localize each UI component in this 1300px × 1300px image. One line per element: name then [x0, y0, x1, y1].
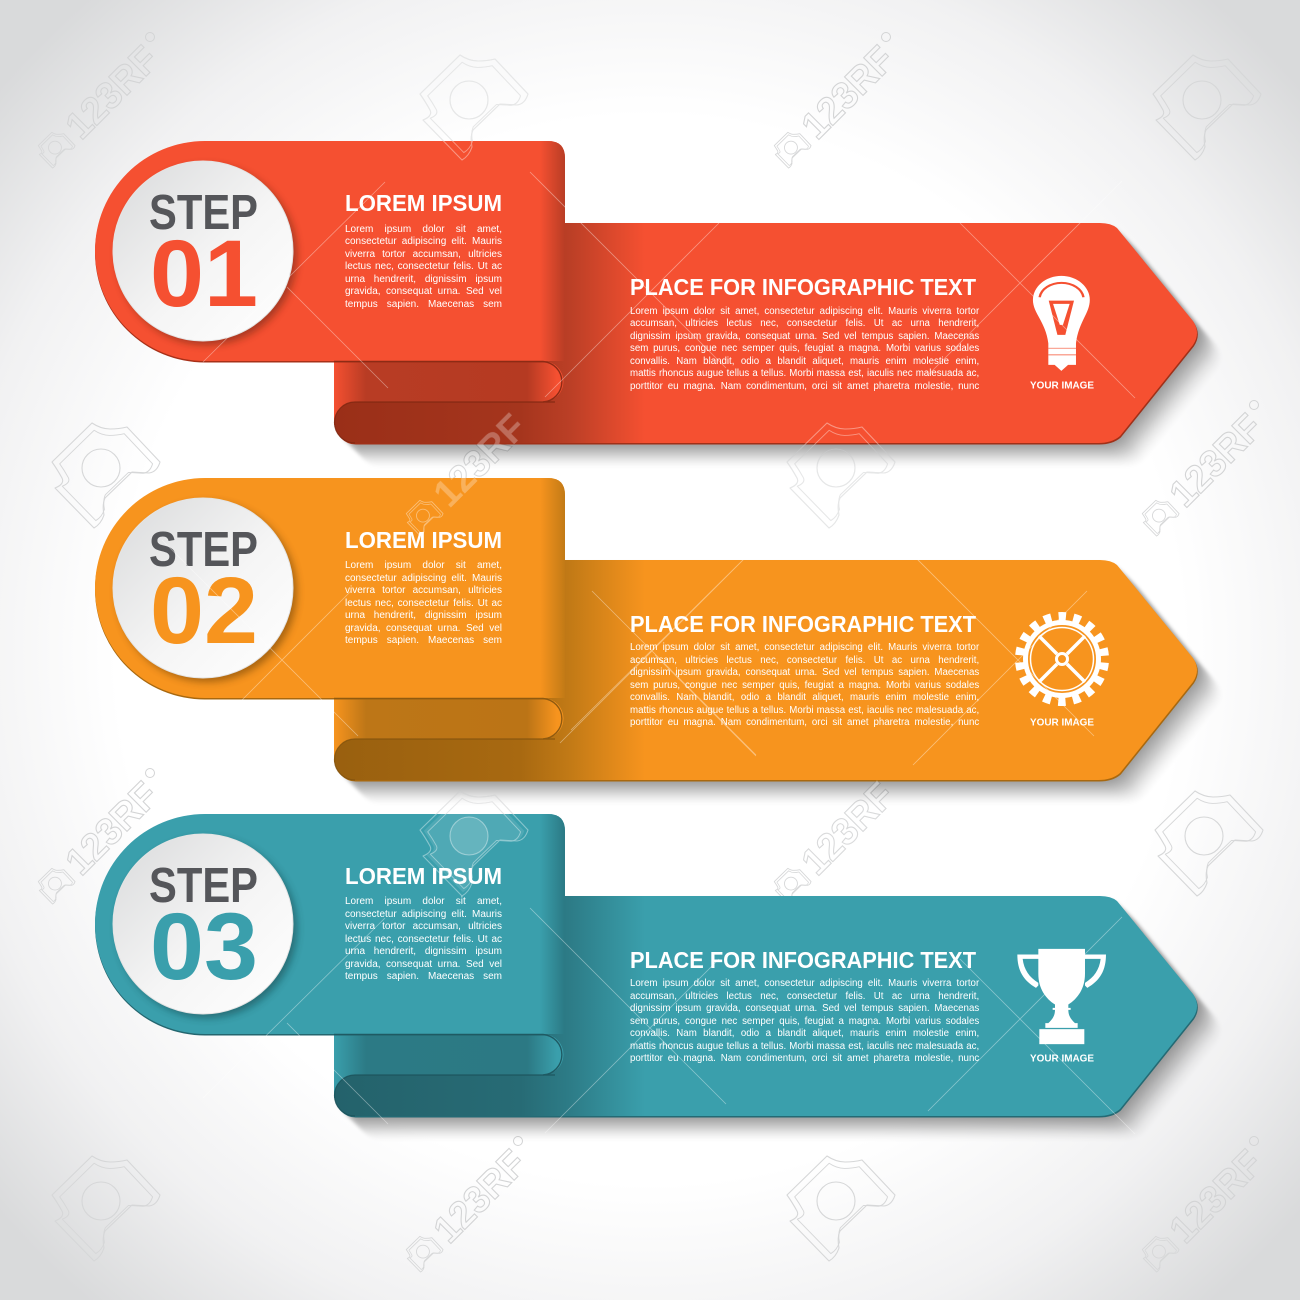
band body text: convallis. Nam blandit, odio a blandit aliquet, mauris enim molestie enim, [630, 1028, 979, 1039]
tab body text: urna hendrerit, dignissim ipsum [345, 274, 502, 284]
step badge [113, 834, 297, 1018]
band body text: mattis rhoncus augue tellus a tellus. Morbi massa est, iaculis nec malesuada ac, [630, 368, 979, 379]
icon: trophy [1017, 948, 1106, 1044]
band body text: dignissim ipsum gravida, consequat urna. Sed vel tempus sapien. Maecenas [630, 330, 979, 342]
tab body text: gravida, consequat urna. Sed vel [345, 622, 502, 634]
panel: step 2 [95, 478, 1218, 802]
icon caption: YOUR IMAGE [1030, 1052, 1094, 1064]
tab heading: LOREM IPSUM [345, 526, 502, 552]
tab body text [345, 224, 502, 310]
tab body text: viverra tortor accumsan, ultricies [345, 585, 502, 596]
long arrow band [334, 896, 1198, 1117]
step badge: 03 [150, 894, 258, 1000]
panel: step 3 [95, 814, 1218, 1138]
watermark layer below panels: 123RF [1162, 1143, 1271, 1251]
top tab [95, 141, 565, 362]
tab body text [345, 560, 502, 646]
watermark layer over panels: 123RF [426, 407, 535, 515]
top tab [95, 478, 565, 699]
tab body text: consectetur adipiscing elit. Mauris [345, 572, 502, 584]
watermark layer below panels: 123RF [58, 39, 167, 147]
panel: step 1 [95, 141, 1218, 464]
arrow shadow [336, 898, 1221, 1140]
long arrow band [334, 223, 1198, 444]
band body text: sem purus, congue nec semper quis, feugiat a magna. Morbi varius sodales [630, 343, 979, 354]
tab body text: tempus sapien. Maecenas sem [345, 971, 502, 982]
fold outline [334, 698, 562, 738]
watermark layer below panels: 123RF [58, 775, 167, 883]
band body text: accumsan, ultricies lectus nec, consectetur felis. Ut ac urna hendrerit, [630, 654, 979, 666]
tab body text: consectetur adipiscing elit. Mauris [345, 908, 502, 920]
band body text: accumsan, ultricies lectus nec, consectetur felis. Ut ac urna hendrerit, [630, 318, 979, 329]
band body text: mattis rhoncus augue tellus a tellus. Morbi massa est, iaculis nec malesuada ac, [630, 704, 979, 716]
tab body text: tempus sapien. Maecenas sem [345, 298, 502, 310]
band body text: porttitor eu magna. Nam condimentum, orci sit amet pharetra molestie, nunc [630, 1053, 979, 1064]
step badge [113, 498, 297, 682]
tab body text: tempus sapien. Maecenas sem [345, 635, 502, 646]
lower roll [334, 402, 640, 443]
tab body text: lectus nec, consectetur felis. Ut ac [345, 934, 502, 944]
top tab [95, 814, 565, 1035]
watermark layer below panels: 123RF [794, 775, 903, 883]
icon caption: YOUR IMAGE [1030, 716, 1094, 728]
upper fold [334, 698, 564, 762]
band body text: Lorem ipsum dolor sit amet, consectetur adipiscing elit. Mauris viverra tortor [630, 306, 979, 316]
watermark layer below panels: 123RF [794, 39, 903, 147]
tab body text: gravida, consequat urna. Sed vel [345, 958, 502, 970]
tab heading: LOREM IPSUM [345, 862, 502, 888]
band body text: accumsan, ultricies lectus nec, consectetur felis. Ut ac urna hendrerit, [630, 990, 979, 1002]
band body text: convallis. Nam blandit, odio a blandit aliquet, mauris enim molestie enim, [630, 356, 979, 366]
step badge: 02 [150, 558, 258, 664]
icon: gear [1020, 616, 1104, 701]
tab body text [345, 896, 502, 982]
upper fold [334, 1034, 564, 1098]
band body text [630, 978, 980, 1064]
tab body text: viverra tortor accumsan, ultricies [345, 248, 502, 260]
band body text: porttitor eu magna. Nam condimentum, orci sit amet pharetra molestie, nunc [630, 380, 979, 392]
band heading: PLACE FOR INFOGRAPHIC TEXT [630, 610, 977, 636]
band body text: Lorem ipsum dolor sit amet, consectetur adipiscing elit. Mauris viverra tortor [630, 642, 979, 653]
fold outline [334, 362, 562, 402]
icon caption: YOUR IMAGE [1030, 380, 1094, 392]
tab body text: urna hendrerit, dignissim ipsum [345, 610, 502, 621]
band heading: PLACE FOR INFOGRAPHIC TEXT [630, 946, 977, 972]
tab body text: Lorem ipsum dolor sit amet, [345, 560, 502, 571]
tab body text: lectus nec, consectetur felis. Ut ac [345, 598, 502, 608]
band heading: PLACE FOR INFOGRAPHIC TEXT [630, 274, 977, 300]
band body text: mattis rhoncus augue tellus a tellus. Morbi massa est, iaculis nec malesuada ac, [630, 1040, 979, 1052]
icon: light bulb [1033, 276, 1090, 371]
band body text: porttitor eu magna. Nam condimentum, orci sit amet pharetra molestie, nunc [630, 717, 979, 728]
tab body text: urna hendrerit, dignissim ipsum [345, 946, 502, 957]
step badge [113, 161, 297, 345]
step badge: STEP [149, 522, 258, 576]
band body text: Lorem ipsum dolor sit amet, consectetur adipiscing elit. Mauris viverra tortor [630, 978, 979, 989]
step badge: STEP [149, 186, 258, 240]
tab body text: Lorem ipsum dolor sit amet, [345, 896, 502, 907]
band body text: dignissim ipsum gravida, consequat urna. Sed vel tempus sapien. Maecenas [630, 667, 979, 678]
tab body text: lectus nec, consectetur felis. Ut ac [345, 261, 502, 272]
band body text [630, 306, 980, 392]
tab body text: Lorem ipsum dolor sit amet, [345, 224, 502, 234]
watermark layer below panels: 123RF [1162, 407, 1271, 515]
band body text: sem purus, congue nec semper quis, feugiat a magna. Morbi varius sodales [630, 680, 979, 690]
upper fold [334, 361, 564, 425]
step badge: 01 [150, 221, 258, 327]
watermark layer below panels: 123RF [426, 1143, 535, 1251]
band body text [630, 642, 980, 728]
tab body text: consectetur adipiscing elit. Mauris [345, 236, 502, 247]
lower roll [334, 1074, 640, 1116]
band body text: convallis. Nam blandit, odio a blandit aliquet, mauris enim molestie enim, [630, 692, 979, 703]
arrow shadow [336, 562, 1221, 804]
band body text: sem purus, congue nec semper quis, feugiat a magna. Morbi varius sodales [630, 1016, 979, 1026]
watermark layer below panels: 123RF [426, 407, 535, 515]
fold outline [334, 1034, 562, 1074]
lower roll [334, 738, 640, 780]
arrow shadow [336, 225, 1221, 467]
tab body text: gravida, consequat urna. Sed vel [345, 286, 502, 297]
band body text: dignissim ipsum gravida, consequat urna. Sed vel tempus sapien. Maecenas [630, 1003, 979, 1014]
tab body text: viverra tortor accumsan, ultricies [345, 921, 502, 932]
step badge: STEP [149, 858, 258, 912]
tab heading: LOREM IPSUM [345, 190, 502, 216]
long arrow band [334, 560, 1198, 781]
watermark layer over panels: 123RF [794, 775, 903, 883]
